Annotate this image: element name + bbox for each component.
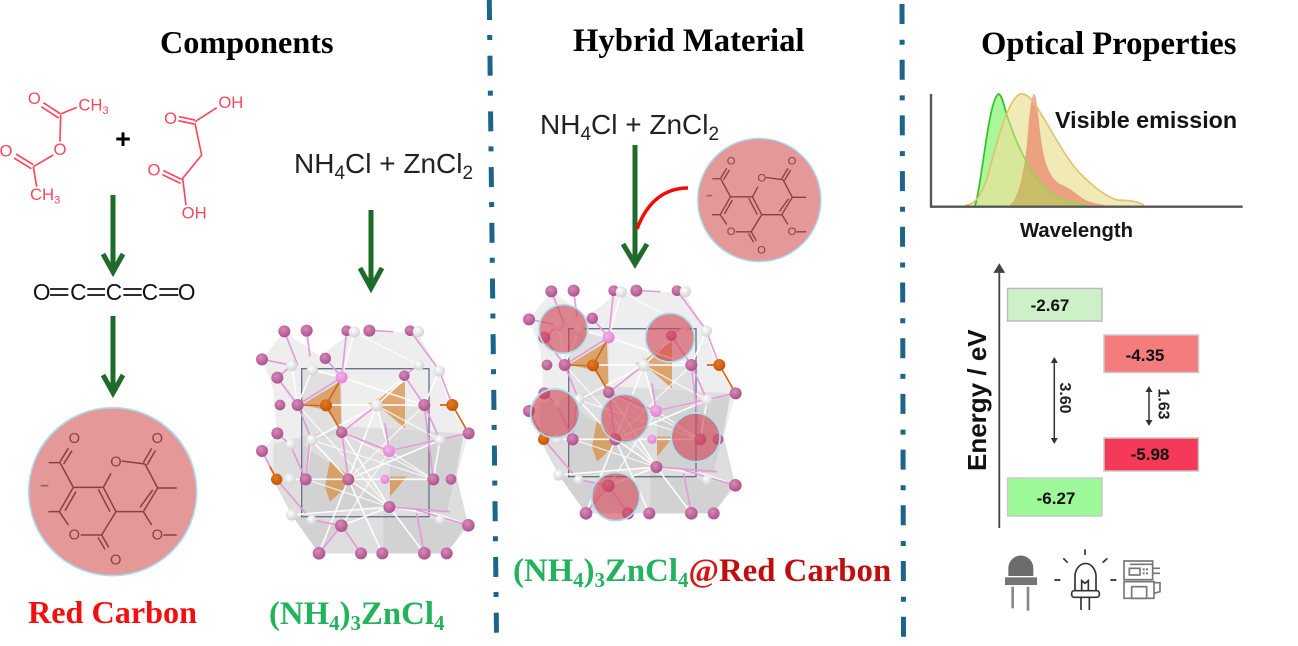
- plus sign: +: [115, 124, 131, 154]
- gap arrow: 1.63: [1146, 386, 1172, 426]
- heading: Components: Components: [160, 24, 333, 60]
- molecule: red carbon disc: O: [69, 528, 80, 544]
- icon: production machine: [1124, 561, 1160, 598]
- molecule: carbon suboxide: [33, 279, 195, 305]
- level: -5.98: -5.98: [1131, 445, 1169, 464]
- level: -2.67: -2.67: [1031, 296, 1069, 315]
- label: (NH4)3ZnCl4@Red Carbon: @: [688, 553, 719, 589]
- molecule: red carbon disc small: O: [757, 244, 766, 256]
- molecule: malonic acid: [148, 93, 243, 222]
- level: -4.35: -4.35: [1126, 346, 1164, 365]
- molecule: red carbon disc: O: [152, 528, 163, 544]
- level: -4.35: [1104, 335, 1198, 372]
- molecule: acetic anhydride: 3: [102, 105, 109, 117]
- label: (NH4)3ZnCl4@Red Carbon: (NH: [513, 553, 573, 589]
- arrow: salts to hybrid: [623, 145, 647, 264]
- level: -6.27: [1008, 478, 1102, 516]
- formula: NH4Cl + ZnCl2 (hybrid): 4: [580, 124, 591, 145]
- formula: NH4Cl + ZnCl2 (components): 2: [462, 163, 473, 184]
- arrow: carbon suboxide to red carbon: [103, 316, 123, 393]
- formula: NH4Cl + ZnCl2 (components): NH: [294, 148, 334, 179]
- crystal structure: hybrid with red carbon discs: [523, 285, 742, 521]
- molecule: acetic anhydride: CH: [30, 185, 54, 204]
- icon: glowing LED outline: [1063, 549, 1107, 610]
- molecule: malonic acid: OH: [218, 93, 243, 112]
- divider: right dash-dot line: [902, 4, 904, 638]
- molecule: malonic acid: OH: [182, 203, 207, 222]
- heading: Optical Properties: Optical Properties: [981, 26, 1236, 62]
- level: -6.27: -6.27: [1037, 489, 1075, 508]
- formula: NH4Cl + ZnCl2 (hybrid): NH: [540, 109, 580, 140]
- molecule: acetic anhydride: 3: [54, 194, 60, 206]
- formula: NH4Cl + ZnCl2 (hybrid): 2: [708, 124, 719, 145]
- curved arrow: red carbon insertion: [637, 188, 688, 229]
- arrow: reactants to carbon suboxide: [103, 195, 123, 272]
- label: (NH4)3ZnCl4: 4: [329, 611, 340, 635]
- molecule: acetic anhydride: O: [28, 89, 41, 108]
- molecule: carbon suboxide: C: [142, 279, 158, 305]
- molecule: red carbon disc small: O: [788, 155, 797, 167]
- label: (NH4)3ZnCl4@Red Carbon: 3: [595, 568, 605, 592]
- label: (NH4)3ZnCl4@Red Carbon: ZnCl: [605, 553, 678, 589]
- molecule: red carbon disc small: O: [727, 155, 736, 167]
- level: -2.67: [1008, 288, 1102, 321]
- dash separator: [1054, 577, 1116, 583]
- icon: filled LED: [1005, 555, 1037, 611]
- energy axis arrow: [995, 265, 1004, 528]
- crystal structure: (NH4)3ZnCl4: [256, 325, 475, 560]
- label: (NH4)3ZnCl4: 3: [351, 611, 361, 635]
- label: Wavelength: Wavelength: [1020, 220, 1133, 242]
- molecule: carbon suboxide: O: [178, 279, 195, 305]
- molecule: carbon suboxide: O: [33, 279, 50, 305]
- molecule: red carbon disc small: O: [727, 226, 736, 238]
- molecule: red carbon disc: O: [152, 431, 163, 447]
- label: Visible emission: Visible emission: [1055, 107, 1237, 133]
- molecule: red carbon disc: [29, 408, 197, 576]
- molecule: red carbon disc small: O: [757, 172, 766, 184]
- label: (NH4)3ZnCl4@Red Carbon: 4: [678, 568, 689, 592]
- level: -5.98: [1104, 438, 1198, 471]
- molecule: carbon suboxide: C: [70, 279, 87, 305]
- gap arrow: 3.60: [1051, 357, 1073, 444]
- label: Red Carbon: Red Carbon: [28, 594, 197, 630]
- label: (NH4)3ZnCl4: (NH: [269, 596, 329, 632]
- molecule: acetic anhydride: [0, 89, 109, 206]
- label: (NH4)3ZnCl4: 4: [434, 611, 445, 635]
- axis label: Energy / eV: Energy / eV: [962, 329, 992, 471]
- formula: NH4Cl + ZnCl2 (components): Cl + ZnCl: [345, 148, 462, 179]
- molecule: red carbon disc: O: [110, 552, 121, 568]
- molecule: red carbon disc: O: [69, 431, 80, 447]
- label: (NH4)3ZnCl4@Red Carbon: Red Carbon: [719, 553, 891, 589]
- heading: Hybrid Material: Hybrid Material: [573, 23, 804, 59]
- energy level diagram: [962, 265, 1198, 528]
- formula: NH4Cl + ZnCl2 (hybrid): Cl + ZnCl: [591, 109, 708, 140]
- divider: left dash-dot line: [489, 0, 496, 634]
- molecule: red carbon disc small: [698, 138, 821, 262]
- molecule: red carbon disc: O: [110, 454, 122, 470]
- arrow: salts to crystal: [360, 210, 382, 288]
- label: (NH4)3ZnCl4@Red Carbon: ): [584, 553, 595, 589]
- gap arrow: 1.63: 1.63: [1154, 388, 1172, 420]
- molecule: acetic anhydride: O: [54, 140, 67, 159]
- icons: LED applications: [1005, 549, 1160, 611]
- label: (NH4)3ZnCl4: ZnCl: [361, 596, 434, 632]
- label: (NH4)3ZnCl4@Red Carbon: 4: [573, 568, 584, 592]
- gap arrow: 3.60: 3.60: [1056, 382, 1073, 414]
- chart: emission spectra: [931, 94, 1243, 242]
- molecule: malonic acid: O: [148, 161, 161, 180]
- molecule: acetic anhydride: CH: [78, 96, 102, 115]
- molecule: malonic acid: O: [164, 109, 177, 128]
- label: (NH4)3ZnCl4: ): [340, 596, 351, 632]
- molecule: carbon suboxide: C: [106, 279, 122, 305]
- formula: NH4Cl + ZnCl2 (components): 4: [334, 163, 345, 184]
- molecule: red carbon disc small: O: [788, 226, 797, 238]
